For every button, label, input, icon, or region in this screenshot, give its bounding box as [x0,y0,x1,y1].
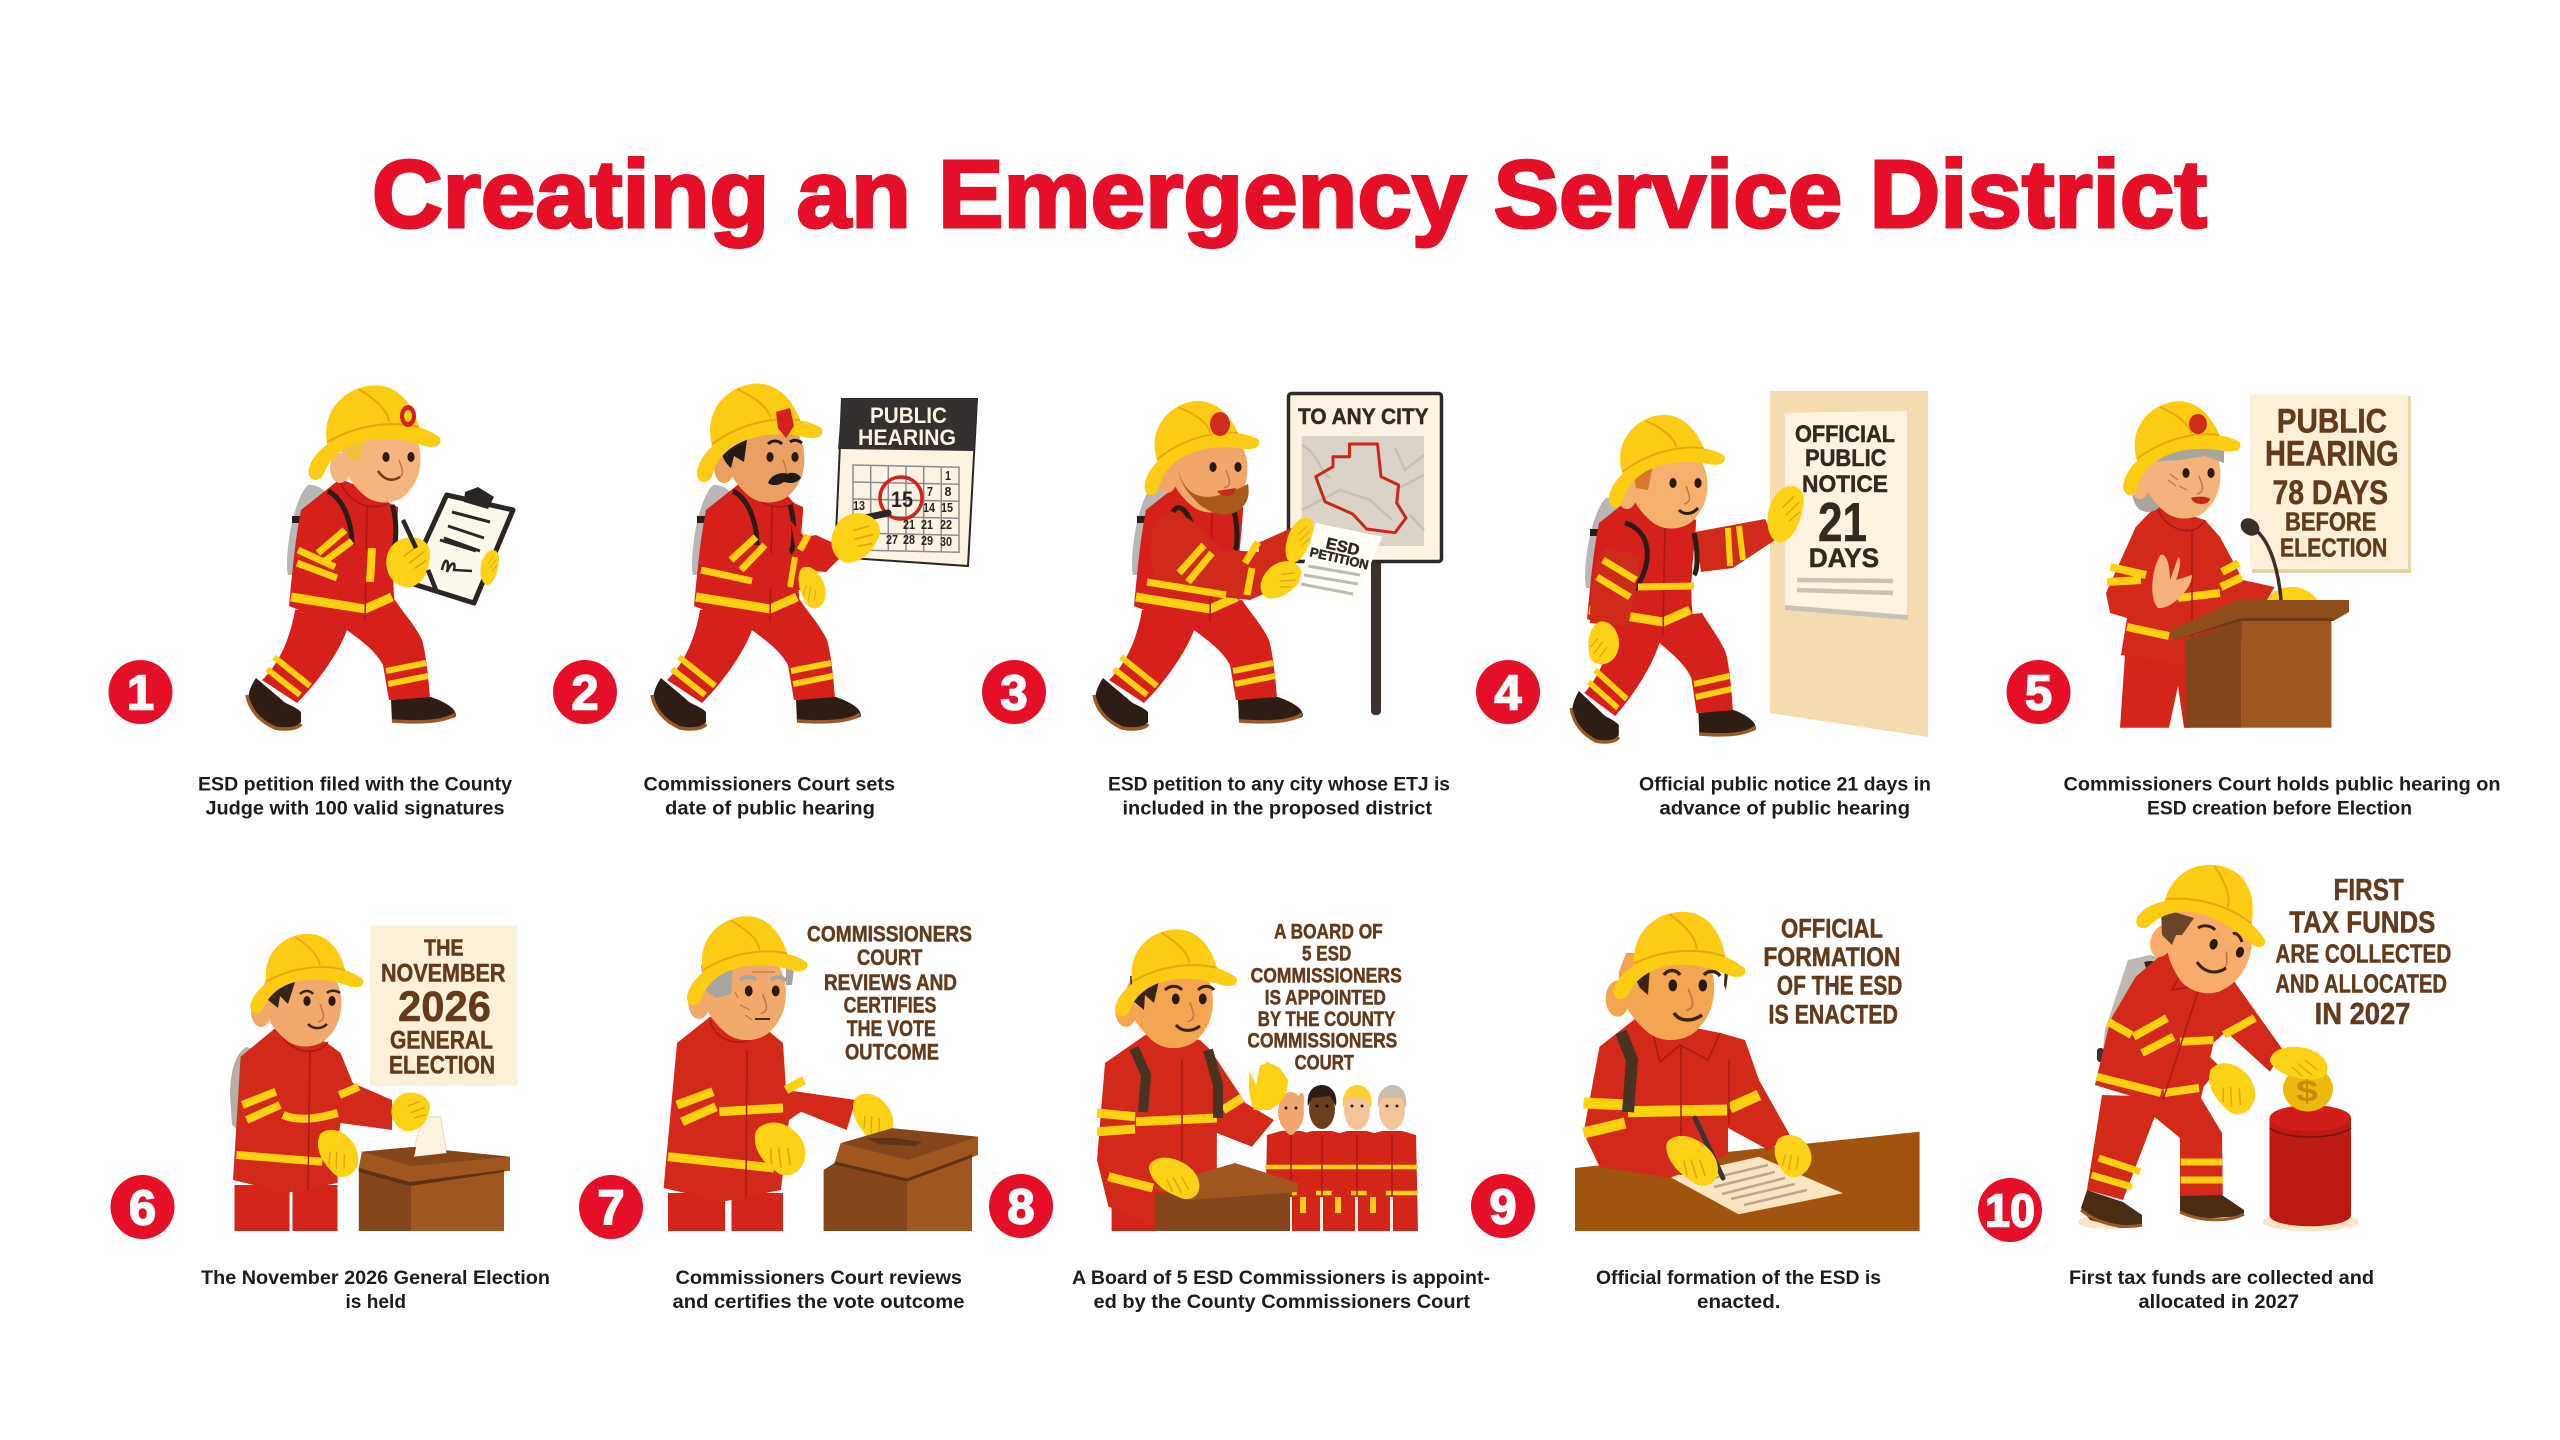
label: commissioners court reviews: COMMISSIONERS [807,922,972,947]
coin collection can: $ [2296,1073,2318,1108]
caption 8: A Board of 5 ESD Commissioners is appoint- [1072,1268,1490,1289]
label: first tax funds: FIRST [2334,872,2404,907]
label: commissioners court reviews: CERTIFIES [844,993,936,1018]
caption 2: Commissioners Court sets [644,774,895,796]
caption 7: Commissioners Court reviews [676,1268,962,1289]
caption 3: included in the proposed district [1122,798,1433,820]
label: a board of 5 esd commissioners [1247,920,1402,1074]
wall with public notice: OFFICIAL [1795,421,1895,448]
calendar sign: public hearing [835,399,977,566]
label: commissioners court reviews: THE VOTE [847,1016,936,1041]
panel: step 1 [108,377,513,820]
calendar sign: public hearing: 22 [940,517,952,532]
caption 10 [2069,1268,2374,1313]
caption 3 [1108,774,1450,820]
caption 4: advance of public hearing [1660,798,1910,820]
badge 7: 7 [597,1182,625,1236]
calendar sign: public hearing: 29 [921,533,933,548]
poster: the november 2026 general election: NOVEMBER [381,960,506,988]
wall with public notice: DAYS [1809,543,1879,573]
badge 6 [110,1175,174,1239]
caption 2: date of public hearing [665,798,875,820]
caption 7: and certifies the vote outcome [672,1292,964,1313]
label: a board of 5 esd commissioners: BY THE COUNTY [1258,1008,1395,1031]
label: first tax funds: AND ALLOCATED [2275,968,2447,998]
group of four board members [1265,1085,1418,1231]
label: first tax funds [2275,872,2451,1031]
label: a board of 5 esd commissioners: COMMISSIONERS [1251,965,1402,988]
caption 10: allocated in 2027 [2138,1292,2299,1313]
poster: public hearing 78 days [2250,394,2411,573]
caption 9 [1596,1268,1881,1313]
badge 6: 6 [129,1182,156,1236]
caption 1 [198,774,512,820]
firefighter at podium [2105,388,2349,728]
poster: public hearing 78 days: PUBLIC [2277,403,2387,441]
calendar sign: public hearing: 21 [903,517,915,532]
caption 10: First tax funds are collected and [2069,1268,2374,1289]
label: commissioners court reviews [807,922,972,1064]
poster: the november 2026 general election: GENERAL [390,1026,493,1054]
calendar sign: public hearing: 1 [945,468,951,483]
panel: step 8 [989,920,1490,1313]
label: a board of 5 esd commissioners: A BOARD OF [1274,920,1383,943]
badge 4: 4 [1494,666,1522,720]
firefighter signing document [1584,909,1819,1193]
badge 7 [579,1175,643,1239]
calendar sign: public hearing: 8 [944,484,952,499]
firefighter posting notice [1571,401,1808,742]
wall with public notice: 21 [1818,491,1867,553]
badge 8 [989,1174,1053,1238]
calendar sign: public hearing: 14 [923,500,936,515]
label: a board of 5 esd commissioners: 5 ESD [1302,943,1351,966]
poster: the november 2026 general election: ELECTION [389,1051,495,1079]
poster: public hearing 78 days: 78 DAYS [2272,474,2388,512]
firefighter casting ballot [230,927,510,1231]
label: first tax funds: ARE COLLECTED [2275,939,2451,969]
road sign: to any city map [1288,394,1442,715]
calendar sign: public hearing: 27 [886,532,898,547]
poster: the november 2026 general election: 2026 [398,983,491,1031]
label: official formation of the esd: IS ENACTED [1768,999,1898,1029]
coin collection can [2262,1066,2358,1231]
calendar sign: public hearing: 15 [891,487,913,512]
label: official formation of the esd: OF THE ESD [1777,970,1902,1000]
panel: step 10 [1978,847,2451,1313]
caption 5: Commissioners Court holds public hearing on [2064,774,2500,796]
caption 1: ESD petition filed with the County [198,774,512,796]
calendar sign: public hearing: PUBLIC [870,403,947,428]
badge 10: 10 [1985,1184,2035,1236]
badge 10 [1978,1178,2042,1242]
badge 3: 3 [1000,666,1028,720]
panel: step 7 [579,907,978,1313]
badge 5 [2006,660,2070,724]
firefighter with raised hand [1097,922,1298,1231]
badge 5: 5 [2025,666,2052,720]
label: official formation of the esd [1763,913,1902,1029]
firefighter handing petition: ESD [1324,535,1361,560]
caption 6: is held [346,1292,406,1313]
poster: the november 2026 general election: THE [424,935,464,961]
label: a board of 5 esd commissioners: COURT [1295,1051,1354,1074]
calendar sign: public hearing: 28 [903,532,915,547]
caption 7 [672,1268,964,1313]
caption 6: The November 2026 General Election [201,1268,550,1289]
caption 4 [1639,774,1931,820]
firefighter certifying vote [664,907,978,1231]
label: first tax funds: IN 2027 [2315,996,2410,1031]
panel: step 3 [982,386,1450,820]
badge 2: 2 [571,666,599,720]
desk with document [1575,1132,1920,1231]
caption 4: Official public notice 21 days in [1639,774,1931,796]
badge 4 [1476,660,1540,724]
caption 9: enacted. [1697,1292,1780,1313]
poster: public hearing 78 days: ELECTION [2280,533,2387,563]
road sign: to any city map: TO ANY CITY [1298,404,1429,429]
caption 9: Official formation of the ESD is [1596,1268,1881,1289]
panel: step 4 [1476,391,1931,820]
label: a board of 5 esd commissioners: IS APPOINTED [1265,986,1386,1009]
label: official formation of the esd: OFFICIAL [1781,913,1883,943]
caption 6 [201,1268,550,1313]
caption 8 [1072,1268,1490,1313]
calendar sign: public hearing: 7 [927,484,933,499]
caption 8: ed by the County Commissioners Court [1094,1292,1471,1313]
firefighter depositing coin [2078,847,2330,1229]
calendar sign: public hearing: HEARING [858,425,956,450]
panel: step 6 [110,926,550,1313]
panel: step 2 [553,370,977,820]
caption 5 [2064,774,2500,820]
panel: step 5 [2006,388,2500,820]
caption 3: ESD petition to any city whose ETJ is [1108,774,1450,796]
calendar sign: public hearing: 13 [853,498,865,513]
label: commissioners court reviews: REVIEWS AND [824,970,957,995]
badge 1 [108,660,172,724]
badge 3 [982,660,1046,724]
poster: public hearing 78 days: HEARING [2265,435,2399,474]
firefighter handing petition [1094,386,1383,729]
wall with public notice [1770,391,1928,737]
caption 1: Judge with 100 valid signatures [206,798,504,820]
badge 9: 9 [1489,1180,1517,1234]
badge 1: 1 [127,666,154,720]
badge 2 [553,660,617,724]
firefighter with clipboard [247,377,513,729]
caption 2 [644,774,895,820]
calendar sign: public hearing: 30 [940,534,952,549]
calendar sign: public hearing: 21 [921,517,933,532]
calendar sign: public hearing: 15 [941,500,953,515]
poster: the november 2026 general election [370,926,518,1086]
label: commissioners court reviews: OUTCOME [845,1039,939,1064]
badge 8: 8 [1007,1180,1035,1234]
title: Creating an Emergency Service District [372,141,2207,248]
wall with public notice: PUBLIC [1805,445,1887,472]
caption 5: ESD creation before Election [2147,798,2412,820]
label: official formation of the esd: FORMATION [1763,942,1900,972]
badge 9 [1471,1174,1535,1238]
panel: step 9 [1471,909,1920,1313]
firefighter handing petition: PETITION [1308,544,1370,572]
wall with public notice: NOTICE [1802,471,1888,498]
firefighter pointing at calendar [652,370,888,729]
label: a board of 5 esd commissioners: COMMISSIONERS [1247,1030,1397,1053]
poster: public hearing 78 days: BEFORE [2285,507,2376,537]
label: first tax funds: TAX FUNDS [2289,905,2435,940]
label: commissioners court reviews: COURT [857,945,923,970]
